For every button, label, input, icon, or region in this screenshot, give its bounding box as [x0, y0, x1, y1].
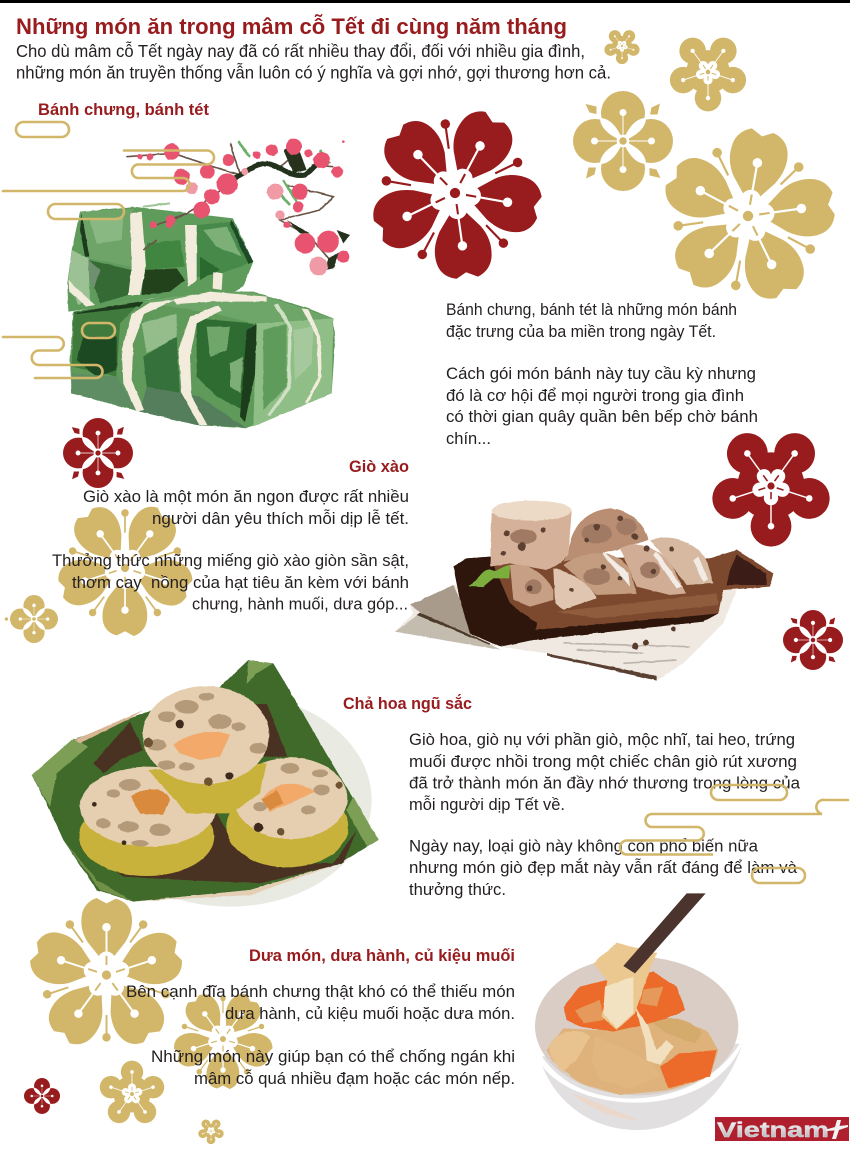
flower: gold sakura bottom left [25, 898, 188, 1052]
flower: gold plum top right [666, 32, 750, 111]
section: giò xào text: Thưởng thức những miếng giò xào giòn sần sật, [52, 551, 409, 570]
section: dưa món heading: Dưa món, dưa hành, củ kiệu muối [249, 947, 515, 965]
flower: gold sakura behind text bottom [170, 989, 276, 1089]
section: chả hoa text: Giò hoa, giò nụ với phần giò, mộc nhĩ, tai heo, trứng [409, 730, 795, 749]
upper cake [67, 207, 253, 312]
food [547, 943, 718, 1095]
banana leaf [32, 660, 378, 902]
illustration: chả hoa ngũ sắc [32, 660, 378, 907]
flower: tiny gold plum [197, 1118, 225, 1144]
blossom branch [127, 139, 350, 275]
section: bánh chưng text [446, 300, 758, 448]
Vietnam+ logo [715, 1117, 849, 1142]
flower: small red four-lobe [24, 1078, 60, 1114]
lower cake [70, 292, 335, 428]
wooden board [453, 550, 773, 647]
three rolls [79, 686, 348, 876]
section: bánh chưng text: có thời gian quây quần bên bếp chờ bánh [446, 407, 758, 426]
section: giò xào heading: Giò xào [349, 458, 409, 476]
section: dưa món text: Bên cạnh đĩa bánh chưng thật khó có thể thiếu món [126, 982, 515, 1001]
section: giò xào text: thơm cay nồng của hạt tiêu ăn kèm với bánh [72, 573, 409, 592]
cloud pill small [82, 323, 115, 338]
section: chả hoa text: muối được nhồi trong một chiếc chân giò rút xương [409, 752, 797, 771]
section: bánh chưng text: đó là cơ hội để mọi người trong gia đình [446, 386, 744, 405]
section: dưa món text: Những món này giúp bạn có thể chống ngán khi [151, 1047, 515, 1066]
section: giò xào text: Giò xào là một món ăn ngon được rất nhiều [83, 487, 409, 506]
section: bánh chưng text: chín... [446, 429, 491, 448]
flower: red plum right [707, 425, 835, 547]
section: chả hoa heading: Chả hoa ngũ sắc [343, 694, 472, 713]
section: chả hoa text: thưởng thức. [409, 880, 506, 899]
intro text: những món ăn truyền thống vẫn luôn có ý nghĩa và gợi nhớ, gợi thương hơn cả. [16, 62, 611, 82]
cloud pill top left [16, 122, 69, 137]
cloud pill right [711, 785, 787, 800]
section: bánh chưng heading: Bánh chưng, bánh tét [38, 101, 210, 119]
flower: small gold plum top [603, 28, 641, 64]
section: chả hoa text [409, 730, 801, 899]
section: chả hoa text: mỗi người dịp Tết về. [409, 795, 565, 814]
section: giò xào text: chưng, hành muối, dưa góp... [192, 594, 408, 614]
flower: small gold four-lobe [5, 595, 58, 643]
section: dưa món text: dưa hành, củ kiệu muối hoặc dưa món. [225, 1004, 515, 1023]
banana leaf and rolls [32, 660, 378, 902]
cloud pill lower right [752, 868, 805, 883]
illustration: bowl of pickles with chopsticks [535, 893, 743, 1130]
bowl [535, 957, 743, 1130]
napkin [395, 585, 737, 681]
section: giò xào text [52, 487, 409, 614]
flower: gold four-lobe [573, 91, 673, 191]
flower: gold sakura behind text [53, 500, 197, 636]
cloud: upper winding line [3, 150, 214, 191]
title: Những món ăn trong mâm cỗ Tết đi cùng năm tháng [16, 14, 567, 39]
intro text: Cho dù mâm cỗ Tết ngày nay đã có rất nhiều thay đổi, đối với nhiều gia đình, [16, 40, 585, 61]
section: bánh chưng text: Bánh chưng, bánh tét là những món bánh [446, 300, 737, 319]
flower: large gold sakura [643, 114, 850, 318]
giò slices [468, 501, 713, 649]
illustration: giò xào on board [395, 501, 773, 681]
cloud: lower winding line [3, 337, 103, 378]
section: chả hoa text: Ngày nay, loại giò này không còn phổ biến nữa [409, 836, 759, 856]
flower: red four-lobe left [63, 418, 133, 488]
flower: red sakura [335, 75, 575, 312]
plate [88, 693, 372, 907]
section: dưa món text [126, 982, 515, 1088]
section: dưa món text: mâm cỗ quá nhiều đạm hoặc các món nếp. [194, 1069, 515, 1088]
chopsticks [623, 893, 706, 973]
cloud pill middle [48, 204, 124, 219]
section: chả hoa text: đã trở thành món ăn đầy nhớ thương trong lòng của [409, 774, 801, 792]
flower: red four-lobe right [783, 610, 843, 670]
section: chả hoa text: nhưng món giò đẹp mắt này vẫn rất đáng để làm và [409, 858, 798, 877]
section: bánh chưng text: đặc trưng của ba miền trong ngày Tết. [446, 322, 716, 341]
cloud: right winding line [620, 800, 848, 855]
intro text [16, 40, 611, 82]
Vietnam+ logo: Vietnam [717, 1119, 829, 1142]
flower: gold plum bottom [97, 1061, 167, 1128]
gold cloud lines [3, 122, 848, 883]
top black bar [0, 0, 850, 3]
section: giò xào text: người dân yêu thích mỗi dịp lễ tết. [152, 509, 409, 528]
section: bánh chưng text: Cách gói món bánh này tuy cầu kỳ nhưng [446, 364, 756, 383]
illustration: bánh chưng with blossom branch [67, 139, 350, 428]
